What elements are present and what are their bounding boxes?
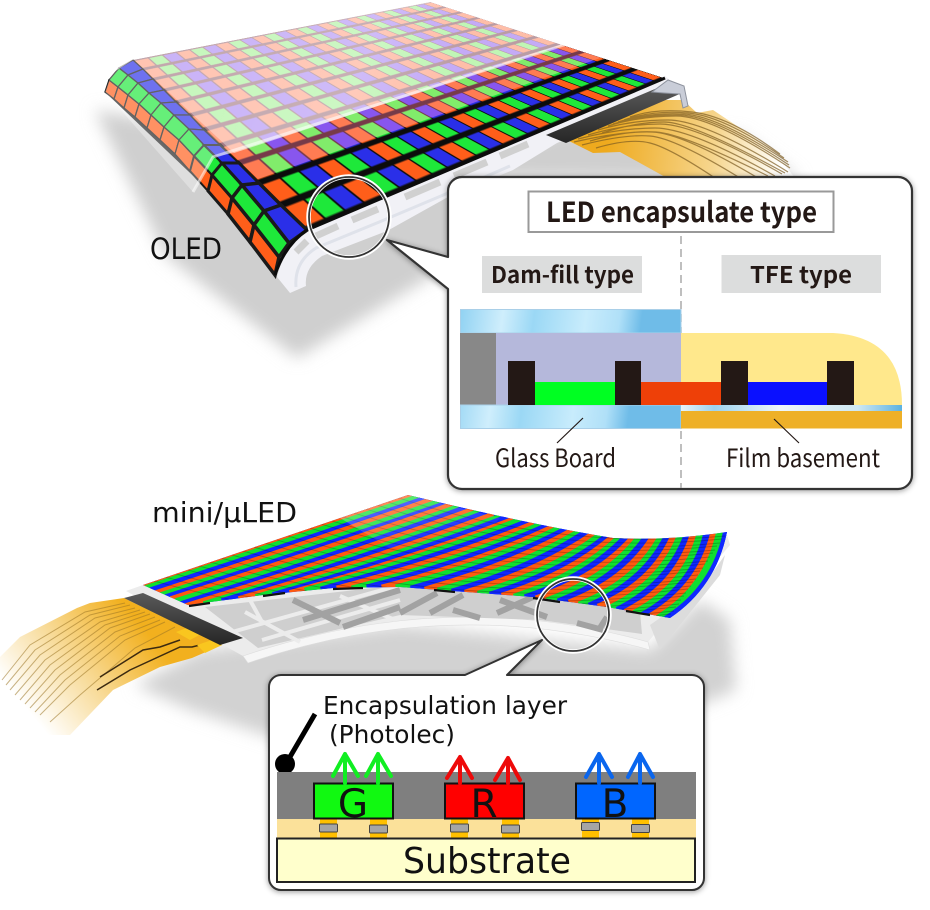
leader: film basement <box>774 419 799 443</box>
panel: LED encapsulate type callout <box>387 177 912 489</box>
OLED label: OLED <box>150 232 222 266</box>
mini LED panel dark underside <box>189 588 650 615</box>
red LED chip: R <box>470 782 498 827</box>
diagram: Dam-fill cross-section <box>460 310 681 428</box>
OLED glass corner detail <box>652 80 688 108</box>
mini LED driver bar <box>124 593 243 645</box>
arrows: green light <box>333 754 391 783</box>
green LED chip <box>314 782 393 827</box>
divider: dashed line <box>680 236 682 488</box>
shadow under mini LED panel <box>135 600 736 740</box>
arrows: blue light <box>586 754 653 783</box>
leader: glass board <box>557 418 583 443</box>
green LED chip: G <box>338 782 368 827</box>
heading: TFE type: TFE type <box>750 256 852 290</box>
blue LED chip: B <box>602 782 628 827</box>
OLED white board <box>277 76 684 293</box>
substrate: Substrate <box>403 841 571 882</box>
OLED flex cable <box>567 100 795 178</box>
label: Encapsulation layer (Photolec): (Photolec) <box>329 720 455 749</box>
blue LED chip <box>576 782 655 827</box>
OLED warm screen tint over pixel grid <box>133 1 606 179</box>
red LED chip <box>445 782 524 827</box>
substrate <box>277 838 695 882</box>
mini LED curved pixel panel <box>140 490 730 625</box>
label: Film basement: Film basement <box>726 439 880 475</box>
label: Encapsulation layer (Photolec) <box>323 691 568 749</box>
leader: pointer with ball <box>275 714 315 774</box>
arrows: red light <box>447 757 520 783</box>
mini LED flex cable <box>0 598 222 735</box>
bonding layer band with bumps <box>277 819 696 838</box>
OLED driver bar <box>546 86 682 143</box>
mini LED label: mini/µLED <box>152 496 297 529</box>
OLED curved left pixel strip <box>105 60 307 275</box>
heading: Dam-fill type: Dam-fill type <box>491 256 634 290</box>
OLED glass cover over panel <box>133 1 567 153</box>
mini LED board <box>126 496 730 663</box>
OLED black front edge <box>275 78 665 275</box>
shadow under OLED panel <box>95 110 800 358</box>
OLED glass edge highlight <box>105 1 567 192</box>
diagram: TFE cross-section <box>681 333 902 428</box>
heading: TFE type <box>722 255 881 293</box>
encapsulation layer band <box>277 772 696 819</box>
heading: LED encapsulate type: LED encapsulate type <box>546 191 817 231</box>
OLED magnifier circle <box>308 176 390 258</box>
OLED main pixel grid <box>134 2 662 228</box>
label: Encapsulation layer (Photolec): Encapsulation layer <box>323 691 568 720</box>
panel: encapsulation layer callout <box>269 640 704 890</box>
label: Glass Board: Glass Board <box>495 439 616 475</box>
mini LED magnifier circle <box>536 578 610 652</box>
OLED glass cover over curved side <box>105 59 234 192</box>
